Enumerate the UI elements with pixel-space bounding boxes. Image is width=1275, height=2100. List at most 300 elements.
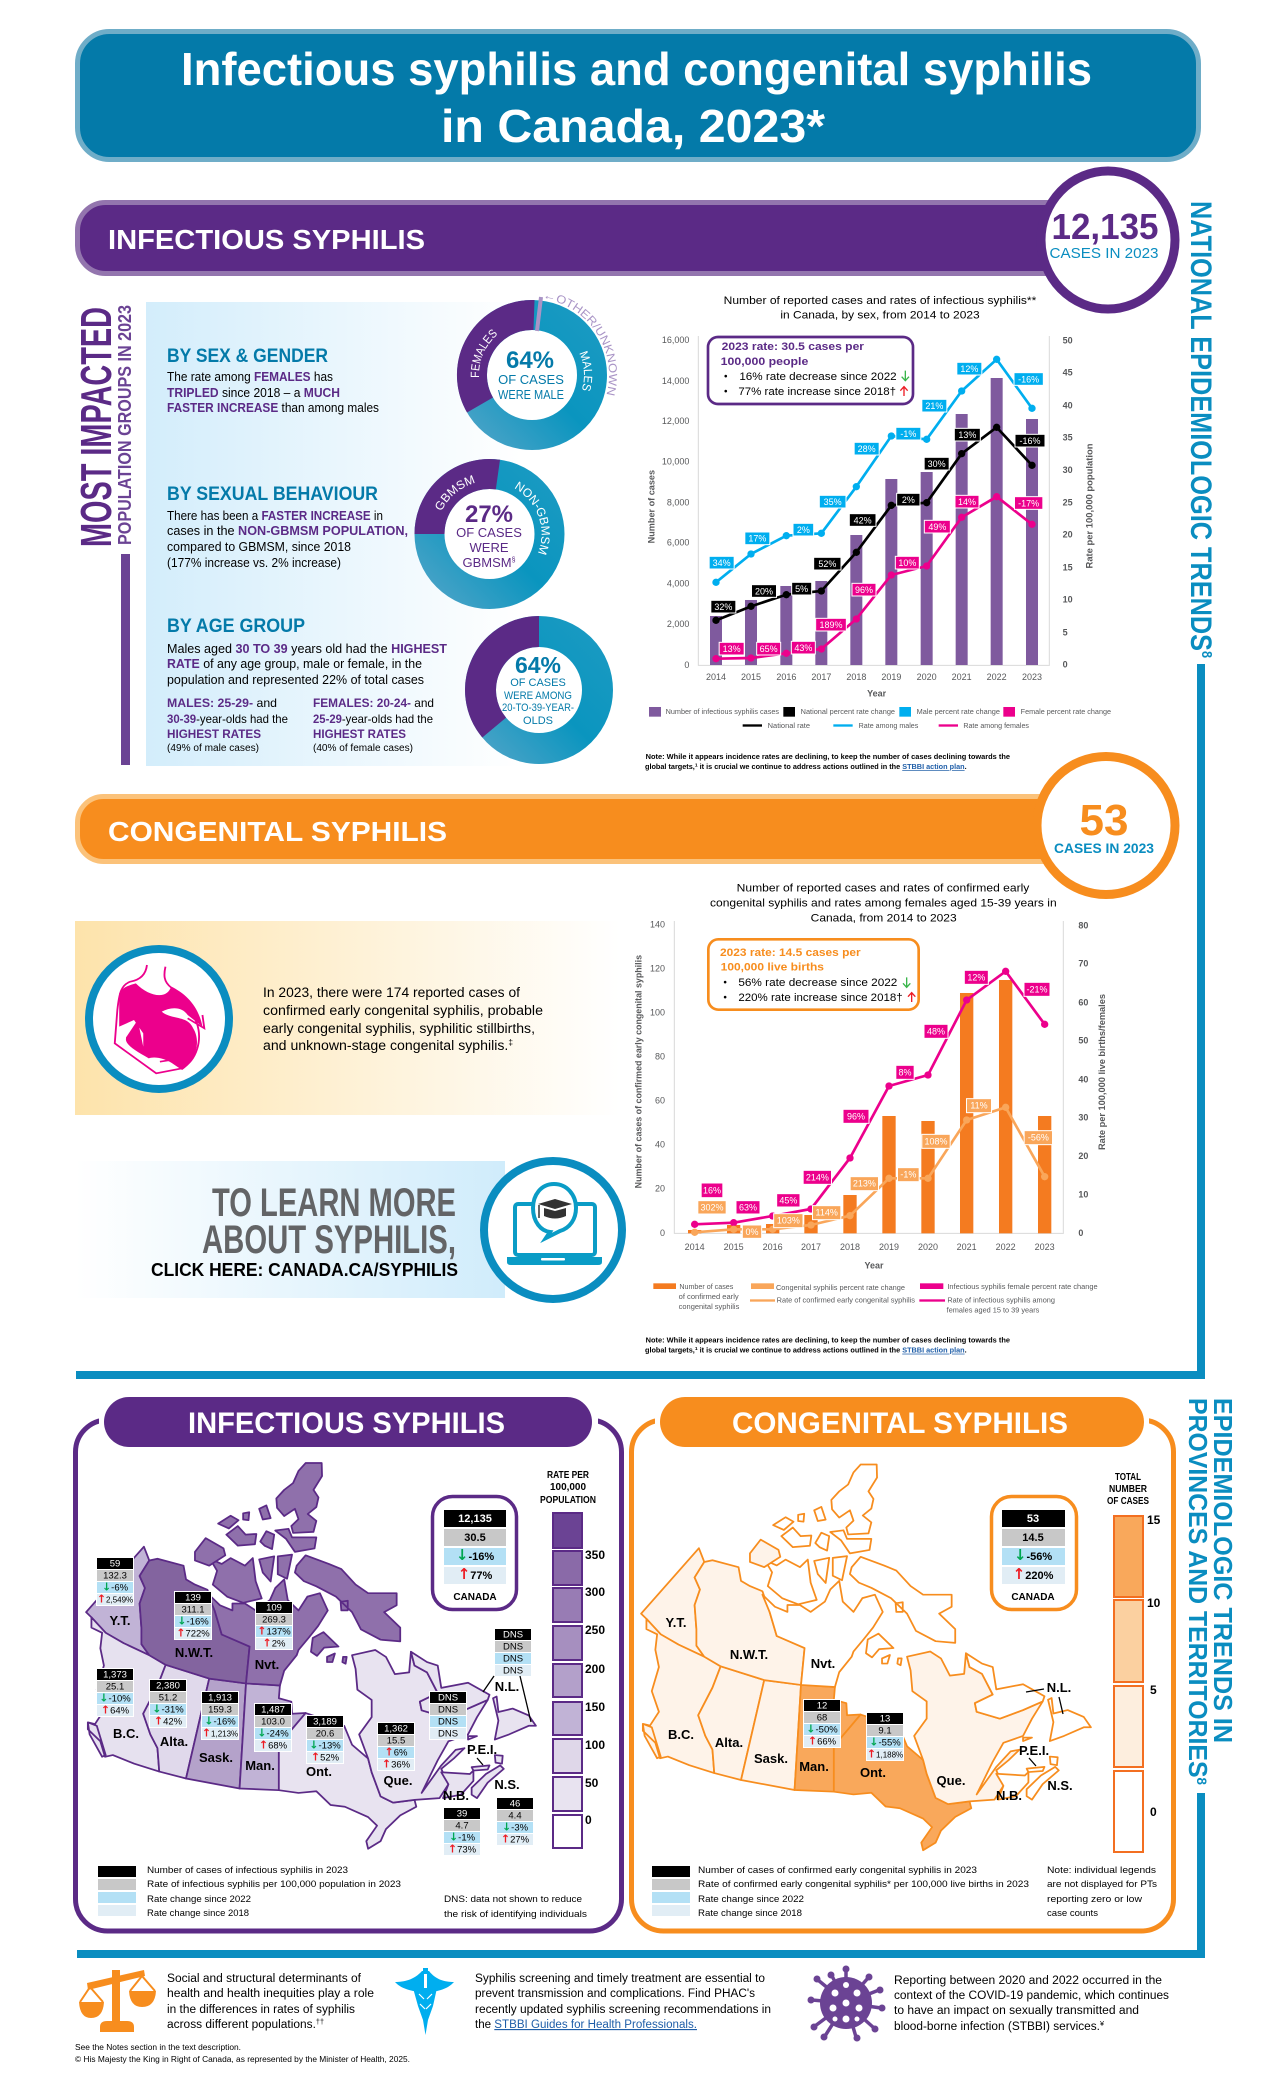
map legend: Note: individual legends [1047,1865,1156,1876]
labels: national percent change: 30% [928,459,946,469]
left axis labels: 0 [684,660,689,670]
legend: Rate of infectious syphilis among [947,1296,1055,1305]
legend: rate per 100,000: 150 [585,1700,605,1714]
axis titles: Number of cases of confirmed early congenital syphilis [634,955,644,1188]
labels: congenital percent change: -56% [1028,1133,1049,1143]
labels: national percent change: -16% [1020,436,1040,446]
legend: rate per 100,000: 250 [585,1623,605,1637]
donut chart: sexual behaviour: OF CASES [456,525,522,540]
labels: male percent change: 28% [858,444,876,454]
callout: 2023 rate [708,337,913,404]
data box: N.B.: ↑73% [448,1842,477,1856]
heading pill: INFECTIOUS SYPHILIS [188,1407,505,1440]
legend: Number of cases [679,1282,734,1291]
text: by age group: HIGHEST RATES [313,727,406,741]
text: by sexual behaviour: (177% increase vs. 2% increase) [167,556,341,570]
labels: national percent change: 13% [958,430,976,440]
labels: female percent change: 13% [723,644,741,654]
legend: Rate among females [963,721,1029,730]
donut chart: sexual behaviour: GBMSM [462,555,512,570]
left axis labels: 14,000 [662,376,689,386]
text: COVID-19 context: blood-borne infection (STBBI) services. [894,2021,1094,2033]
labels: female percent change: 10% [898,558,916,568]
data box: N.S.: ↓-3% [502,1820,529,1834]
title banner: Infectious syphilis and congenital syphilis [181,43,1092,95]
legend: Number of infectious syphilis cases [666,707,779,716]
legend: Rate among males [859,721,919,730]
line: rate among females [712,493,1036,662]
legend [649,707,1111,730]
note: STBBI action plan. [902,1346,967,1355]
data box: Ont.: 20.6 [316,1728,334,1740]
data box: Y.T.: 59 [110,1558,120,1570]
year labels: 2018 [846,672,866,682]
province labels: N.W.T. [175,1645,213,1660]
data box: Sask.: ↓-16% [204,1714,236,1728]
text: by sex and gender: The rate among FEMALES has [167,370,333,384]
legend: rate per 100,000: 350 [585,1548,605,1562]
map legend: Rate change since 2018 [698,1908,802,1919]
right axis labels [1063,335,1073,670]
panel: congenital syphilis map [632,1397,1174,1931]
data box: Man.: 68 [817,1712,827,1724]
labels: congenital percent change: 213% [853,1179,876,1189]
donut chart: sex and gender: MALES [580,350,592,391]
data box: N.B.: ↓-1% [449,1830,476,1844]
labels: congenital percent change: 302% [701,1203,723,1213]
data box: N.S.: 4.4 [508,1810,522,1822]
data box: Nvt.: 269.3 [262,1614,286,1626]
data box: Sask.: 1,913 [208,1692,232,1704]
text: by age group: 30-39-year-olds had the [167,712,288,726]
text: screening: prevent transmission and complications. Find PHAC's [475,1988,755,2000]
callout: 2023 rate: 2023 rate: 30.5 cases per [722,341,864,353]
icon: pregnant person [89,949,229,1089]
data box: N.B.: 4.7 [455,1820,469,1832]
text: screening: the STBBI Guides for Health Professionals. [475,2019,697,2031]
vertical heading: national trends [76,201,1217,1375]
note: global targets, [645,762,695,771]
province labels: Que. [937,1773,965,1788]
data box: Alta.: 2,380 [156,1680,180,1692]
panel: most impacted groups [146,302,521,766]
right axis labels: 15 [1063,562,1073,572]
data box: Ont.: 9.1 [878,1726,892,1736]
left axis labels: 100 [650,1008,665,1018]
year labels: 2021 [952,672,972,682]
labels: female percent change: 96% [855,585,873,595]
heading: most impacted: POPULATION GROUPS IN 2023 [115,305,135,545]
national data box [992,1496,1076,1610]
text: determinants [167,1973,374,2031]
donut chart: age group [480,632,598,748]
left axis labels: 0 [660,1228,665,1238]
national data box: CANADA [453,1592,497,1603]
line: rate among females 15 to 39 [691,968,1048,1228]
heading pill [104,1397,592,1447]
text: by age group: FEMALES: 20-24- and [313,696,434,710]
vertical heading: provinces and territories [77,1398,1238,1954]
labels: national percent change: 5% [795,584,808,594]
right axis labels: 50 [1078,1036,1088,1046]
chart: infectious syphilis cases and rates [645,295,1111,771]
data box: DNS lower: DNS [438,1692,458,1704]
year labels: 2018 [840,1242,860,1252]
icon: scales of justice [79,1970,156,2032]
panel: learn more [75,1161,622,1299]
labels: congenital percent change [698,1099,1052,1238]
province labels [666,1615,1073,1803]
callout: 53 cases: 53 [1080,796,1128,845]
donut chart: sex and gender: ←OTHER/UNKNOWN [546,295,618,396]
province labels: N.W.T. [730,1647,768,1662]
legend: rate per 100,000: 50 [585,1776,599,1790]
legend: Infectious syphilis female percent rate change [947,1282,1098,1291]
province labels: Que. [384,1773,412,1788]
left axis labels: 10,000 [662,457,689,467]
text: determinants: health and health inequities play a role [167,1988,374,2000]
data box: Man. [803,1699,841,1748]
data box: B.C.: 1,373 [103,1670,127,1680]
right axis labels: 40 [1078,1074,1088,1084]
legend: total number of cases: NUMBER [1109,1484,1148,1495]
line: rate among males [712,356,1036,586]
data box: Nvt.: 109 [266,1602,282,1614]
text: COVID-19 context: Reporting between 2020 and 2022 occurred in the [894,1975,1162,1987]
labels: male percent change [709,362,1043,569]
labels: congenital percent change: 0% [745,1227,758,1237]
axis titles: Year [864,1260,884,1270]
map legend: Rate change since 2022 [698,1894,804,1905]
text: determinants: across different populations. [167,2019,311,2031]
text: by sex and gender: FASTER INCREASE than among males [167,401,379,415]
year labels: 2016 [776,672,796,682]
data box: DNS lower [429,1691,467,1740]
text: by sex and gender: TRIPLED since 2018 – a MUCH [167,386,340,400]
year labels: 2015 [724,1242,744,1252]
data box: DNS lower: DNS [438,1716,458,1728]
right axis labels: 35 [1063,433,1073,443]
legend: rate per 100,000: RATE PER [547,1470,590,1481]
data box: Y.T.: ↑2,549% [97,1592,133,1606]
callout: 2023 rate [708,939,919,1010]
data box: Sask.: 159.3 [208,1704,232,1716]
axis titles: Number of cases [647,470,657,543]
year labels: 2014 [685,1242,705,1252]
text: determinants: in the differences in rates of syphilis [167,2004,355,2016]
year labels: 2014 [706,672,726,682]
year labels [706,672,1042,682]
data box: Sask.: ↑1,213% [202,1726,238,1740]
labels: infectious female percent change: 12% [967,973,985,983]
labels: female percent change: 65% [760,644,778,654]
legend: rate per 100,000: 300 [585,1585,605,1599]
callout: 53 cases: CASES IN 2023 [1054,840,1154,856]
map legend: Number of cases of confirmed early congenital syphilis in 2023 [698,1865,977,1876]
year labels: 2022 [987,672,1007,682]
callout: 2023 rate: 220% rate increase since 2018† [738,992,903,1004]
note [645,752,1010,771]
province labels: Man. [245,1758,275,1773]
footer notes: See the Notes section in the text description. [75,2043,241,2052]
legend: total number of cases [1107,1472,1161,1852]
callout: 2023 rate: • [723,992,727,1003]
labels: male percent change: -1% [900,429,916,439]
text: congenital summary: In 2023, there were 174 reported cases of [263,985,520,1000]
text: by sexual behaviour: cases in the NON-GBMSM POPULATION, [167,524,408,538]
data box: Que.: ↑36% [382,1758,411,1770]
map legend: Rate of confirmed early congenital syphilis* per 100,000 live births in 2023 [698,1879,1029,1890]
text: by age group: (40% of female cases) [313,743,413,754]
donut chart: sex and gender: FEMALES [470,330,497,377]
text: screening: recently updated syphilis screening recommendations in [475,2004,771,2016]
labels: infectious female percent change: 48% [927,1027,945,1037]
left axis labels: 6,000 [667,538,689,548]
callout: 2023 rate: 100,000 people [721,356,808,368]
right axis labels: 0 [1063,660,1068,670]
right axis labels: 40 [1063,400,1073,410]
data box: Man.: ↑66% [808,1734,837,1748]
donut chart: sex and gender: WERE MALE [498,387,564,402]
data box: N.S.: 46 [510,1798,520,1810]
data box: Ont.: ↑52% [311,1750,340,1764]
legend: rate per 100,000: 200 [585,1662,605,1676]
heading: to learn more: CLICK HERE: CANADA.CA/SYPHILIS [151,1260,458,1280]
right axis labels: 0 [1078,1228,1083,1238]
legend: rate per 100,000 [540,1470,605,1848]
data box: Ont.: 13 [880,1714,890,1724]
data box: N.W.T.: ↑722% [176,1626,210,1640]
data box: B.C.: ↑64% [101,1704,130,1716]
map legend: are not displayed for PTs [1047,1879,1157,1890]
data box: Sask. [201,1691,239,1740]
legend: rate per 100,000: 100 [585,1738,605,1752]
note: it is crucial we continue to address actions outlined in the [698,762,902,771]
callout: 2023 rate: 77% rate increase since 2018† [738,386,896,398]
note: Note: While it appears incidence rates are declining, to keep the number of cases declining towards the [646,1336,1010,1345]
data box: N.W.T.: ↓-16% [177,1614,209,1628]
map legend: Rate change since 2018 [147,1908,249,1919]
labels: infectious female percent change: 63% [739,1203,757,1213]
province labels: N.S. [1047,1778,1073,1793]
section header: congenital syphilis: CONGENITAL SYPHILIS [108,816,447,847]
province labels: P.E.I. [1019,1743,1049,1758]
data box: Ont.: ↓-13% [309,1738,341,1752]
icon: caduceus [395,1968,454,2035]
labels: infectious female percent change: -21% [1027,985,1047,995]
donut chart: sexual behaviour: GBMSM [436,475,475,510]
labels: infectious female percent change: 16% [703,1186,721,1196]
callout: 2023 rate: 56% rate decrease since 2022 [738,977,897,989]
province labels: Sask. [199,1750,233,1765]
chart title: Number of reported cases and rates of infectious syphilis** [724,295,1037,307]
data box: Alta.: 51.2 [159,1692,177,1704]
vertical heading: provinces and territories: EPIDEMIOLOGIC TRENDS IN [1208,1398,1238,1743]
text: by age group: RATE of any age group, male or female, in the [167,657,422,671]
data box: N.W.T.: 311.1 [181,1604,205,1616]
data box: N.B.: 39 [457,1808,467,1820]
data box: Nvt.: ↑137% [257,1624,291,1638]
map legend: DNS: data not shown to reduce [444,1894,582,1905]
legend: of confirmed early [679,1292,739,1301]
icon: laptop with graduation cap [484,1161,622,1299]
labels: infectious female percent change: 45% [779,1196,797,1206]
title banner [78,32,1198,160]
province labels: Y.T. [666,1615,686,1630]
labels: national percent change: 20% [755,586,773,596]
data box: Man.: ↓-50% [806,1722,838,1736]
text: COVID-19 context: to have an impact on sexually transmitted and [894,2005,1139,2017]
data box: N.W.T. [174,1591,212,1640]
data box: Nvt.: ↑2% [263,1636,286,1650]
year labels: 2015 [741,672,761,682]
national data box: CANADA [1011,1592,1055,1603]
heading pill: CONGENITAL SYPHILIS [732,1407,1068,1440]
text: by age group: (49% of male cases) [167,743,259,754]
national data box: ↓-16% [456,1546,494,1564]
left axis labels: 20 [655,1184,665,1194]
map legend [652,1865,1157,1919]
legend: total number of cases: OF CASES [1107,1496,1149,1507]
data box: Nvt. [255,1601,293,1650]
section header: infectious syphilis: INFECTIOUS SYPHILIS [108,224,425,255]
year labels: 2020 [917,672,937,682]
labels: male percent change: -16% [1018,374,1039,384]
labels: infectious female percent change [701,970,1050,1214]
left axis labels: 8,000 [667,498,689,508]
callout: 12,135 cases [1041,171,1175,309]
donut chart: sex and gender [456,295,618,450]
province labels: B.C. [668,1727,694,1742]
chart title [724,295,1037,322]
data box: N.L.: DNS [503,1654,523,1664]
chart title: Number of reported cases and rates of confirmed early [737,883,1030,895]
data box: Man.: ↑68% [259,1738,288,1752]
labels: male percent change: 2% [797,525,810,535]
map: Canada rates [86,1463,536,1849]
text: congenital summary: early congenital syphilis, syphilitic stillbirths, [263,1021,535,1036]
callout: 2023 rate: • [724,386,728,397]
province labels: P.E.I. [467,1742,497,1757]
vertical heading: provinces and territories: PROVINCES AND TERRITORIES [1183,1398,1213,1795]
left axis labels: 60 [655,1096,665,1106]
national data box: 14.5 [1022,1532,1044,1544]
note: global targets, [645,1346,695,1355]
data box: Man.: ↓-24% [257,1726,289,1740]
text: congenital summary [263,985,543,1053]
national data box: 30.5 [464,1532,486,1544]
legend: congenital syphilis [679,1302,740,1311]
labels: male percent change: 17% [748,534,766,544]
labels: congenital percent change: 103% [777,1216,800,1226]
donut chart: age group: 20-TO-39-YEAR- [502,702,574,714]
callout: 2023 rate: • [724,371,728,382]
legend: total number of cases: 10 [1147,1596,1161,1610]
labels: infectious female percent change: 214% [806,1173,829,1183]
labels: national percent change: 52% [818,559,836,569]
left axis labels: 12,000 [662,416,689,426]
right axis labels: 20 [1078,1151,1088,1161]
text: by age group: MALES: 25-29- and [167,696,277,710]
data box: Y.T. [96,1557,134,1606]
note: STBBI action plan. [902,762,967,771]
data box: N.L. [495,1629,531,1676]
province labels: N.S. [494,1777,520,1792]
axis titles: Year [867,689,887,699]
province labels: Y.T. [110,1613,130,1628]
data box: B.C.: 25.1 [106,1682,124,1692]
legend: Female percent rate change [1021,707,1111,716]
note: 1 [695,1346,698,1352]
data box: Ont. [866,1712,904,1761]
labels: female percent change: -17% [1018,498,1039,508]
donut chart: age group: 64% [515,652,561,678]
labels: female percent change: 189% [820,620,842,630]
left axis labels: 140 [650,920,665,930]
map legend: Rate of infectious syphilis per 100,000 population in 2023 [147,1879,401,1890]
right axis labels: 25 [1063,497,1073,507]
labels: male percent change: 34% [713,558,731,568]
map legend: the risk of identifying individuals [444,1909,587,1920]
left axis labels: 120 [650,964,665,974]
text: congenital summary: ‡ [508,1038,513,1047]
note: Note: While it appears incidence rates are declining, to keep the number of cases declining towards the [646,752,1010,761]
year labels: 2022 [996,1242,1016,1252]
province labels: Alta. [160,1734,188,1749]
text: by sexual behaviour: BY SEXUAL BEHAVIOUR [167,484,378,505]
text: COVID-19 context: ¥ [1100,2021,1104,2028]
heading: to learn more: ABOUT SYPHILIS, [202,1218,456,1262]
data box: N.S. [497,1798,533,1846]
donut chart: sexual behaviour: 27% [465,501,513,528]
chart: congenital syphilis cases and rates [634,883,1107,1355]
text: screening [475,1973,771,2031]
callout: 12,135 cases: CASES IN 2023 [1050,245,1158,262]
legend [653,1282,1098,1315]
text: by sexual behaviour: There has been a FASTER INCREASE in [167,509,383,523]
national data box: ↑220% [1013,1565,1054,1583]
year labels: 2019 [879,1242,899,1252]
data box: N.B. [444,1808,480,1856]
map: Canada rates [641,1465,1091,1850]
text: determinants: †† [316,2019,324,2026]
legend: Congenital syphilis percent rate change [776,1283,905,1292]
data box: N.L.: DNS [503,1630,523,1640]
legend: rate per 100,000: 100,000 [550,1482,586,1493]
heading pill [660,1397,1144,1447]
callout: 2023 rate: 16% rate decrease since 2022 [739,371,897,383]
legend: National rate [768,721,810,730]
province labels: N.B. [443,1788,469,1803]
data box: N.L.: DNS [503,1666,523,1676]
text: by age group: BY AGE GROUP [167,616,305,637]
labels: female percent change [719,495,1043,655]
text: by age group: Males aged 30 TO 39 years old had the HIGHEST [167,642,447,656]
data box: B.C.: ↓-10% [99,1692,131,1704]
donut chart: sexual behaviour: WERE [470,540,509,555]
year labels: 2023 [1035,1242,1055,1252]
national data box [432,1496,516,1610]
national data box: ↑77% [458,1565,493,1583]
title banner: in Canada, 2023* [441,100,825,152]
text: by age group: 25-29-year-olds had the [313,712,433,726]
text: screening: Syphilis screening and timely treatment are essential to [475,1973,765,1985]
legend: National percent rate change [801,707,895,716]
labels: infectious female percent change: 8% [898,1068,911,1078]
chart title [710,883,1057,925]
data box: Ont.: 3,189 [313,1716,337,1728]
year labels: 2021 [957,1242,977,1252]
